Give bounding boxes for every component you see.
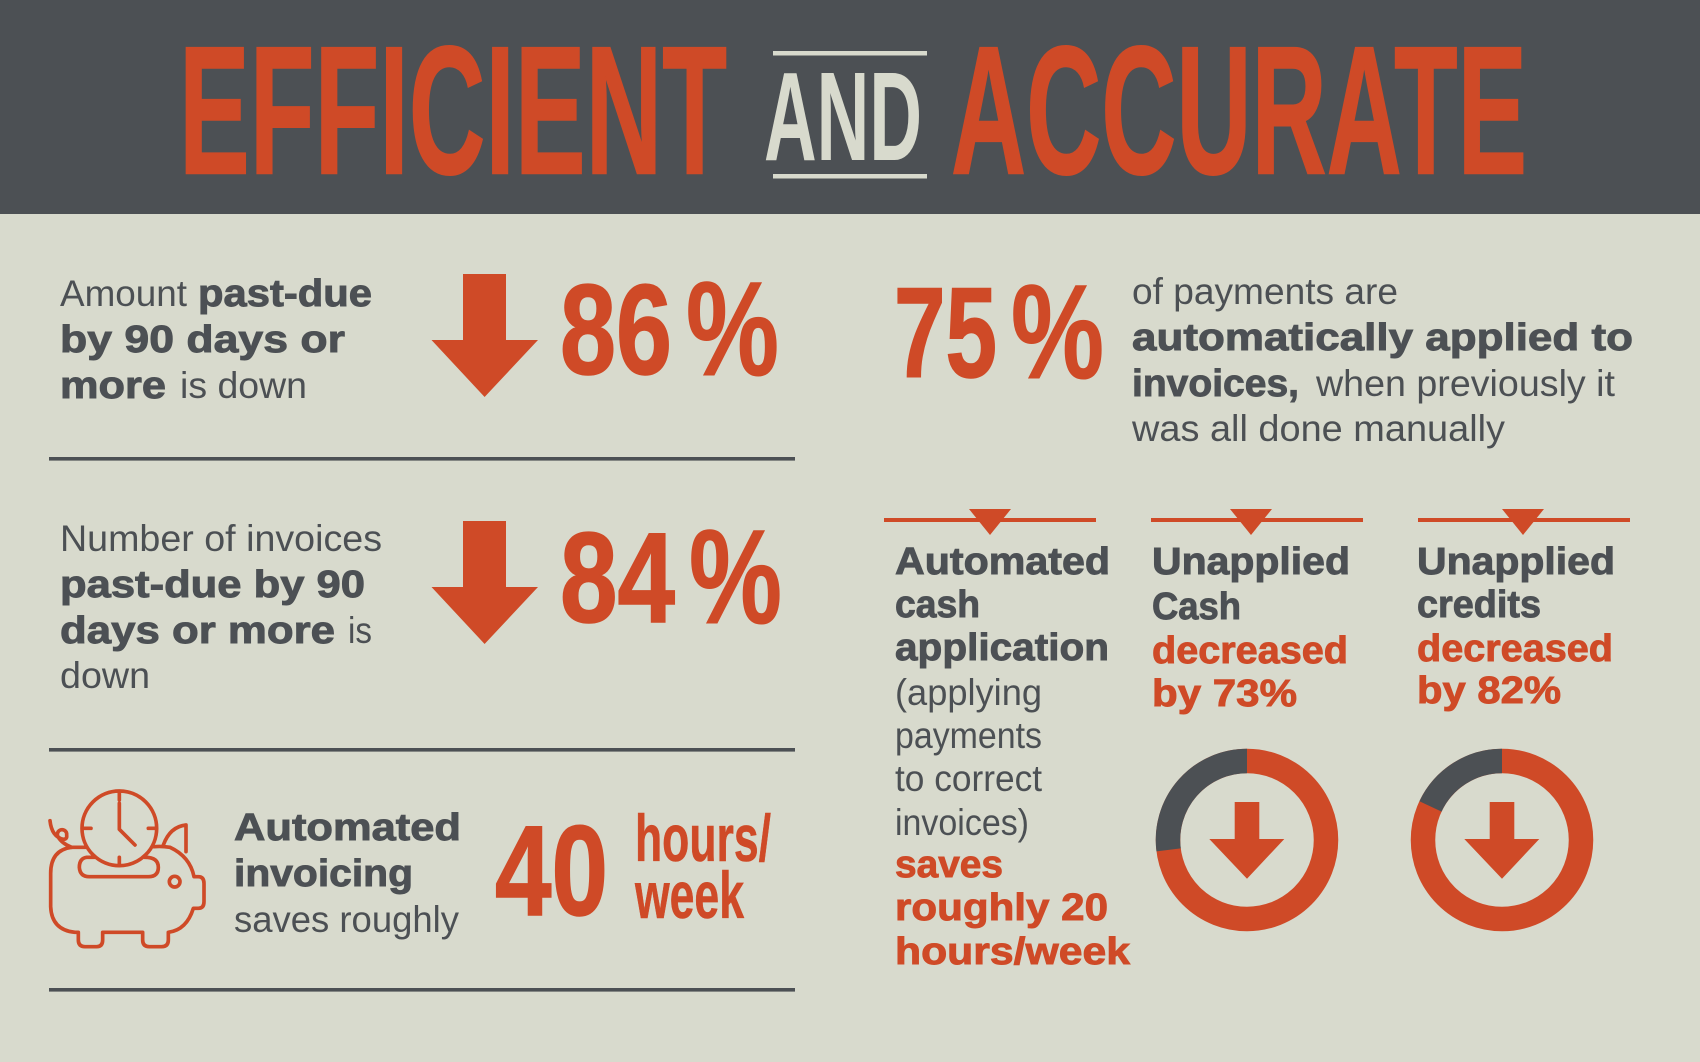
text: unapplied cash description: by 73%: [1152, 673, 1297, 715]
stat: amount past-due: [60, 255, 779, 407]
label: hours per week: hours/: [635, 801, 771, 875]
text: invoices past-due description: past-due by 90: [60, 564, 365, 606]
text: cash application description: saves: [895, 844, 1003, 886]
text: invoices past-due description: is: [348, 610, 372, 651]
icon: piggy bank with clock: [50, 791, 204, 947]
text: cash application description: payments: [895, 715, 1042, 756]
text: amount past-due description: Amount: [60, 273, 188, 314]
text: payments description: was all done manually: [1131, 408, 1506, 449]
text: payments description: automatically applied to: [1132, 317, 1633, 359]
header banner: [0, 0, 1700, 214]
text: unapplied cash description: [1152, 541, 1350, 715]
text: cash application description: (applying: [895, 672, 1042, 713]
text: payments description: of payments are: [1132, 271, 1398, 312]
text: unapplied credits description: [1417, 541, 1615, 712]
text: amount past-due description: [60, 273, 372, 407]
text: amount past-due description: more: [60, 365, 166, 407]
text: amount past-due description: by 90 days or: [60, 319, 345, 361]
column: unapplied cash: [1151, 509, 1363, 919]
text: payments description: [1131, 271, 1633, 449]
text: invoices past-due description: Number of invoices: [60, 518, 382, 559]
title: and: [764, 46, 927, 187]
marker line with triangle: [1151, 509, 1363, 535]
text: cash application description: to correct: [895, 758, 1043, 799]
number: 86%: [560, 255, 779, 404]
number: 75%: 75: [894, 262, 997, 405]
number: 86%: %: [686, 255, 779, 404]
title: and: AND: [764, 46, 922, 187]
text: amount past-due description: is down: [180, 365, 307, 406]
stat: automatically applied payments: [894, 258, 1633, 449]
text: unapplied cash description: Cash: [1152, 586, 1241, 628]
number: 86%: 86: [560, 259, 672, 402]
marker line with triangle: [1418, 509, 1630, 535]
number: 40: 40: [495, 800, 608, 943]
title: efficient: EFFICIENT: [179, 8, 727, 212]
text: invoices past-due description: [60, 518, 382, 696]
donut chart: 82%: [1423, 761, 1581, 919]
number: 84%: [560, 503, 782, 652]
text: automated invoicing description: saves roughly: [234, 899, 459, 940]
text: cash application description: roughly 20: [895, 887, 1108, 929]
column: automated cash application: [884, 509, 1131, 973]
donut chart: 73%: [1168, 761, 1326, 919]
text: unapplied credits description: Unapplied: [1417, 541, 1615, 583]
text: automated invoicing description: [234, 807, 461, 940]
number: 75%: [894, 258, 1104, 407]
text: payments description: invoices,: [1132, 363, 1299, 405]
text: unapplied credits description: credits: [1417, 584, 1541, 626]
stat: invoices past-due: [60, 503, 782, 696]
text: cash application description: hours/week: [895, 931, 1131, 973]
label: hours per week: week: [634, 858, 744, 932]
text: cash application description: cash: [895, 584, 980, 626]
text: unapplied cash description: Unapplied: [1152, 541, 1350, 583]
text: unapplied cash description: decreased: [1152, 630, 1348, 672]
text: cash application description: Automated: [895, 541, 1110, 583]
marker line with triangle: [884, 509, 1096, 535]
icon: down arrow: [432, 274, 538, 397]
label: hours per week: [634, 801, 771, 932]
text: cash application description: [895, 541, 1131, 973]
text: automated invoicing description: Automated: [234, 807, 461, 849]
text: cash application description: application: [895, 627, 1109, 669]
stat: automated invoicing: [50, 791, 771, 947]
column: unapplied credits: [1417, 509, 1630, 919]
text: invoices past-due description: down: [60, 655, 150, 696]
text: unapplied credits description: decreased: [1417, 628, 1613, 670]
text: payments description: when previously it: [1315, 363, 1616, 404]
text: cash application description: invoices): [895, 802, 1029, 843]
icon: down arrow: [432, 521, 538, 644]
text: invoices past-due description: days or more: [60, 610, 335, 652]
number: 75%: %: [1011, 258, 1104, 407]
text: unapplied credits description: by 82%: [1417, 670, 1561, 712]
number: 84%: %: [689, 503, 782, 652]
text: automated invoicing description: invoicing: [234, 853, 413, 895]
number: 84%: 84: [560, 507, 675, 650]
text: amount past-due description: past-due: [198, 273, 372, 315]
